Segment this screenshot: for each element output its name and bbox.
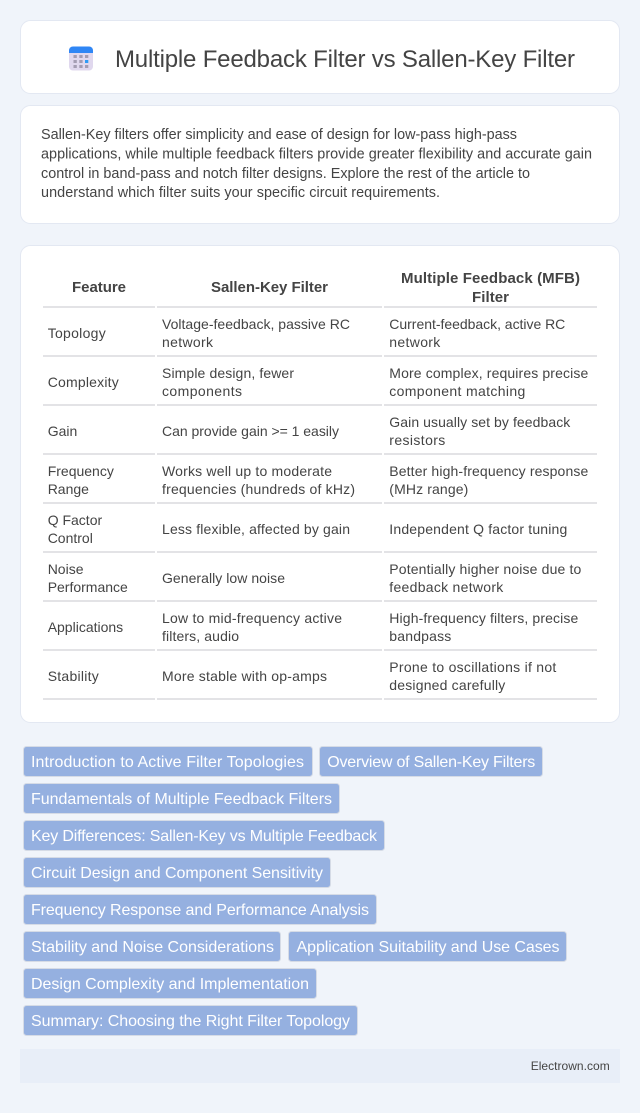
row: gain <box>48 414 571 448</box>
tag: circuit design <box>24 858 330 888</box>
row: noise performance <box>48 561 582 595</box>
intro text: Sallen-Key filters offer simplicity and ease of design for low-pass high-pass <box>41 127 517 143</box>
row: noise performance: feedback network <box>389 579 504 595</box>
row: applications: bandpass <box>389 628 451 644</box>
table header: Sallen-Key Filter <box>211 279 328 296</box>
row: q factor control <box>48 512 567 546</box>
tag: introduction: Introduction to Active Filter Topologies <box>31 754 304 771</box>
intro text: applications, while multiple feedback filters provide greater flexibility and accurate gain <box>41 146 592 162</box>
tag: design complexity: Design Complexity and Implementation <box>31 976 309 993</box>
tag: frequency response <box>24 894 376 924</box>
row: noise performance: Generally low noise <box>162 570 285 586</box>
row: topology: Voltage-feedback, passive RC <box>162 316 350 332</box>
tag: introduction <box>24 746 312 776</box>
row: q factor control: Less flexible, affected by gain <box>162 521 350 537</box>
row: topology: Current-feedback, active RC <box>389 316 565 332</box>
tag: fundamentals <box>24 784 340 814</box>
tag: application <box>288 932 566 962</box>
row: stability: Prone to oscillations if not <box>389 659 556 675</box>
tag: summary <box>24 1006 358 1036</box>
row: complexity: component matching <box>389 383 525 399</box>
panel: comparison table <box>20 246 620 722</box>
row: stability <box>48 659 556 693</box>
table header: Multiple Feedback (MFB) <box>401 270 580 287</box>
tag: overview: Overview of Sallen-Key Filters <box>327 754 535 771</box>
footer credit: Electrown.com <box>531 1059 610 1073</box>
row: gain: Gain usually set by feedback <box>389 414 571 430</box>
row: complexity: More complex, requires precise <box>389 365 589 381</box>
tag: key differences: Key Differences: Sallen-Key vs Multiple Feedback <box>31 828 378 845</box>
row: topology: Topology <box>48 325 106 341</box>
tag: key differences <box>24 820 384 850</box>
intro text <box>41 127 592 201</box>
tag: stability <box>24 932 280 962</box>
icon: calendar grid <box>69 46 93 70</box>
row: gain: Gain <box>48 423 77 439</box>
row: frequency range: (MHz range) <box>389 481 468 497</box>
row: gain: resistors <box>389 432 445 448</box>
row: applications: High-frequency filters, precise <box>389 610 579 626</box>
tag: overview <box>320 746 542 776</box>
row: frequency range: Better high-frequency response <box>389 463 589 479</box>
tag: circuit design: Circuit Design and Component Sensitivity <box>31 865 323 882</box>
intro text: understand which filter suits your specific circuit requirements. <box>41 185 440 201</box>
title: Multiple Feedback Filter vs Sallen-Key Filter <box>115 46 575 73</box>
row: q factor control: Q Factor <box>48 512 102 528</box>
footer <box>20 1049 620 1083</box>
tag: summary: Summary: Choosing the Right Filter Topology <box>31 1013 350 1030</box>
row: q factor control: Independent Q factor tuning <box>389 521 567 537</box>
row: applications: filters, audio <box>162 628 239 644</box>
row: q factor control: Control <box>48 530 93 546</box>
tag: stability: Stability and Noise Considerations <box>31 939 274 956</box>
table header: Feature <box>72 279 126 296</box>
row: complexity: components <box>162 383 242 399</box>
row: frequency range: frequencies (hundreds of kHz) <box>162 481 355 497</box>
row: topology: network <box>389 334 441 350</box>
row: topology <box>48 316 565 350</box>
row: complexity <box>48 365 589 399</box>
row: frequency range <box>48 463 589 497</box>
tag: fundamentals: Fundamentals of Multiple Feedback Filters <box>31 791 332 808</box>
row: noise performance: Potentially higher noise due to <box>389 561 582 577</box>
panel: introduction <box>20 106 620 224</box>
table header <box>72 270 580 306</box>
row: topology: network <box>162 334 214 350</box>
tag: design complexity <box>24 968 316 998</box>
row: frequency range: Range <box>48 481 89 497</box>
tag: application: Application Suitability and Use Cases <box>296 939 560 956</box>
row: applications: Applications <box>48 619 123 635</box>
row: frequency range: Frequency <box>48 463 114 479</box>
row: applications: Low to mid-frequency active <box>162 610 342 626</box>
panel: header <box>20 20 620 94</box>
table header: Filter <box>472 289 509 306</box>
row: applications <box>48 610 579 644</box>
row: noise performance: Noise <box>48 561 84 577</box>
row: noise performance: Performance <box>48 579 128 595</box>
row: gain: Can provide gain >= 1 easily <box>162 423 339 439</box>
tag: frequency response: Frequency Response and Performance Analysis <box>31 902 369 919</box>
row: stability: designed carefully <box>389 677 505 693</box>
row: stability: More stable with op-amps <box>162 668 327 684</box>
row: stability: Stability <box>48 668 99 684</box>
row: complexity: Simple design, fewer <box>162 365 294 381</box>
topic tags <box>24 746 566 1036</box>
row: frequency range: Works well up to moderate <box>162 463 332 479</box>
intro text: control in band-pass and notch filter designs. Explore the rest of the article to <box>41 166 530 182</box>
row: complexity: Complexity <box>48 374 119 390</box>
